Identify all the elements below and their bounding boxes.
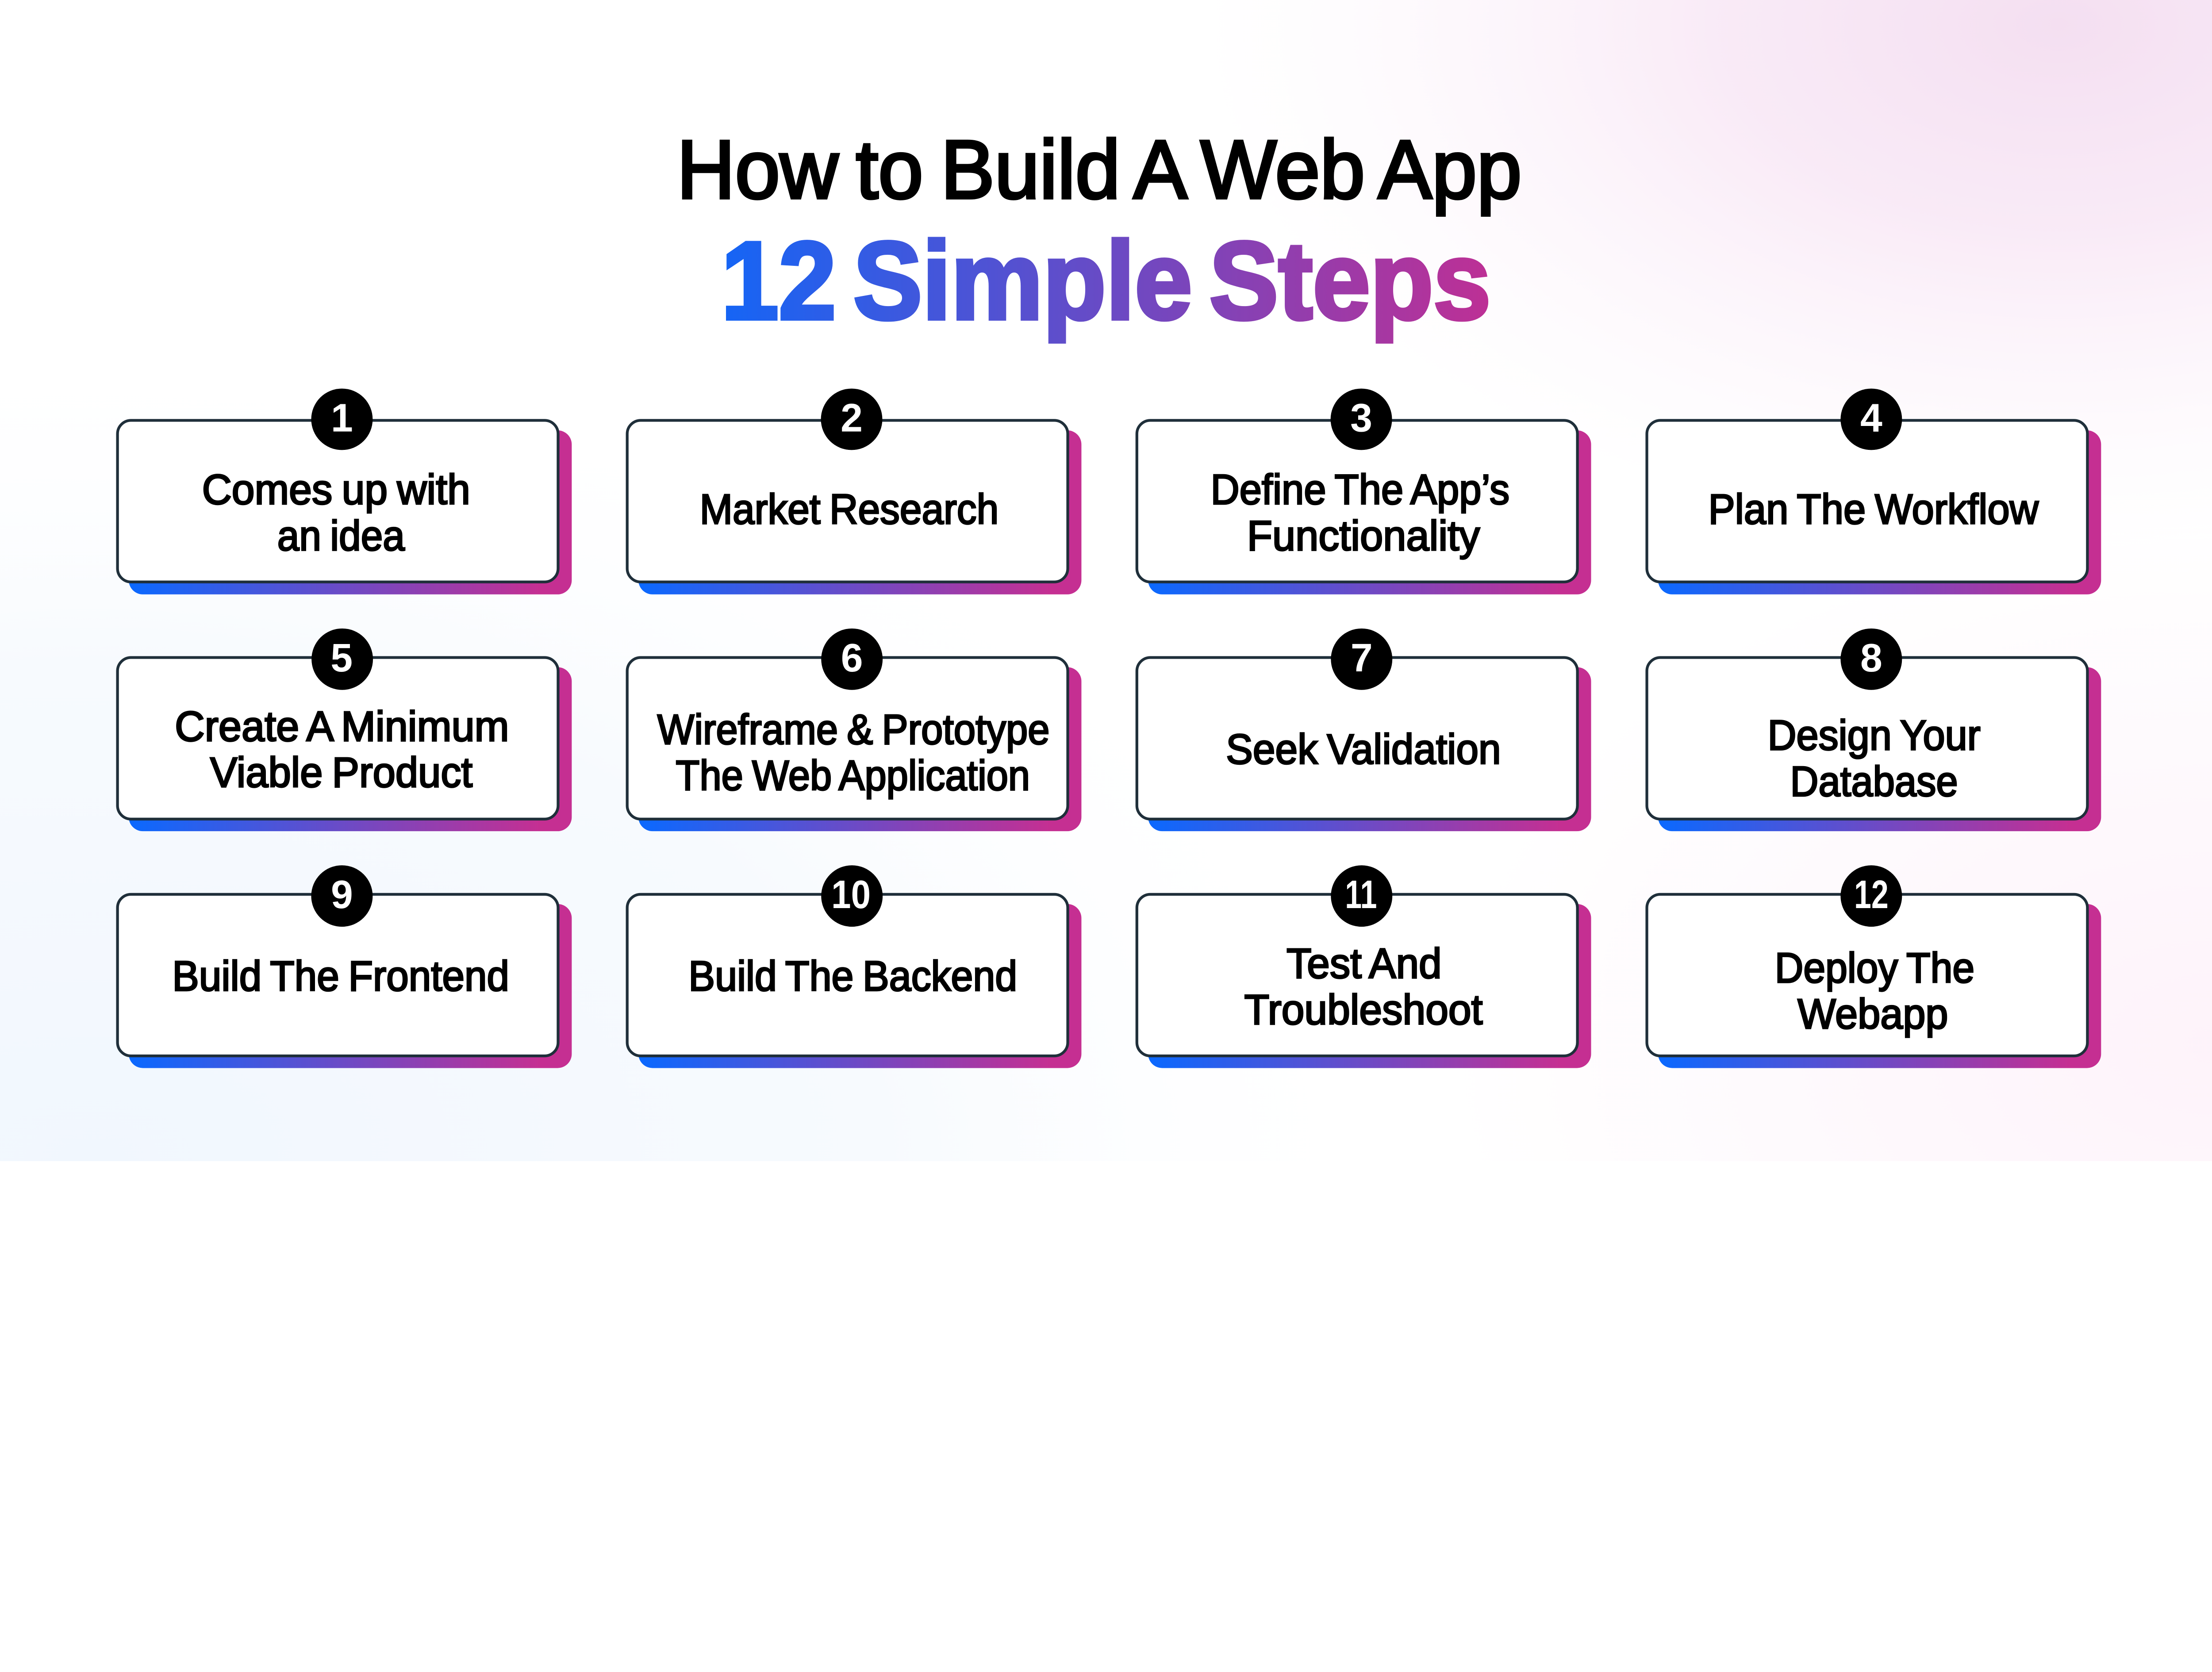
card 7: Seek Validation xyxy=(1137,629,1591,831)
card 9: Build The Frontend: Build The Frontend xyxy=(172,953,509,1000)
card 1: Comes up with an idea xyxy=(118,388,572,594)
card 6: Wireframe & Prototype The Web Application: Wireframe & Prototype xyxy=(657,706,1050,753)
card 7: Seek Validation: Seek Validation xyxy=(1226,725,1501,773)
card 8: Design Your Database xyxy=(1647,629,2101,831)
subtitle: 12 Simple Steps: 12 Simple Steps xyxy=(721,219,1491,342)
card 10: Build The Backend xyxy=(627,865,1081,1068)
card 10: Build The Backend: Build The Backend xyxy=(688,953,1017,1000)
card 11: Test And Troubleshoot xyxy=(1137,865,1591,1068)
card 6: Wireframe & Prototype The Web Application: The Web Application xyxy=(676,752,1030,799)
card 9: Build The Frontend: 9 xyxy=(331,872,353,917)
card 3: Define The App's Functionality: Define The App’s xyxy=(1210,466,1509,514)
card 2: Market Research xyxy=(627,388,1081,594)
card 5: Create A Minimum Viable Product: Viable Product xyxy=(210,749,472,796)
card 11: Test And Troubleshoot: 11 xyxy=(1345,872,1377,917)
card 9: Build The Frontend xyxy=(118,865,572,1068)
card 12: Deploy The Webapp xyxy=(1647,865,2101,1068)
card 8: Design Your Database: Database xyxy=(1790,758,1958,805)
card 5: Create A Minimum Viable Product: 5 xyxy=(330,636,353,680)
card 6: Wireframe & Prototype The Web Application xyxy=(627,629,1081,831)
card 12: Deploy The Webapp: Deploy The xyxy=(1775,944,1974,992)
card 2: Market Research: Market Research xyxy=(700,486,998,533)
card 3: Define The App's Functionality: 3 xyxy=(1350,396,1372,440)
card 12: Deploy The Webapp: Webapp xyxy=(1797,990,1948,1038)
card 3: Define The App's Functionality: Functionality xyxy=(1247,512,1480,560)
card 1: Comes up with an idea: Comes up with xyxy=(202,466,470,514)
card 5: Create A Minimum Viable Product xyxy=(118,629,572,831)
card 4: Plan The Workflow: 4 xyxy=(1860,396,1882,440)
card 2: Market Research: 2 xyxy=(841,396,863,440)
card 4: Plan The Workflow: Plan The Workflow xyxy=(1708,486,2039,533)
card 11: Test And Troubleshoot: Test And xyxy=(1286,940,1442,987)
card 6: Wireframe & Prototype The Web Application: 6 xyxy=(841,636,863,680)
card 1: Comes up with an idea: an idea xyxy=(277,512,405,560)
card 3: Define The App's Functionality xyxy=(1137,388,1591,594)
card 10: Build The Backend: 10 xyxy=(831,872,871,917)
card 4: Plan The Workflow xyxy=(1647,388,2101,594)
card 7: Seek Validation: 7 xyxy=(1351,636,1373,680)
card 8: Design Your Database: 8 xyxy=(1860,636,1882,680)
title: How to Build A Web App: How to Build A Web App xyxy=(677,123,1522,216)
card 5: Create A Minimum Viable Product: Create A Minimum xyxy=(175,703,509,750)
card 8: Design Your Database: Design Your xyxy=(1767,712,1981,759)
card 11: Test And Troubleshoot: Troubleshoot xyxy=(1244,986,1482,1033)
card 1: Comes up with an idea: 1 xyxy=(331,396,353,440)
card 12: Deploy The Webapp: 12 xyxy=(1854,872,1889,917)
